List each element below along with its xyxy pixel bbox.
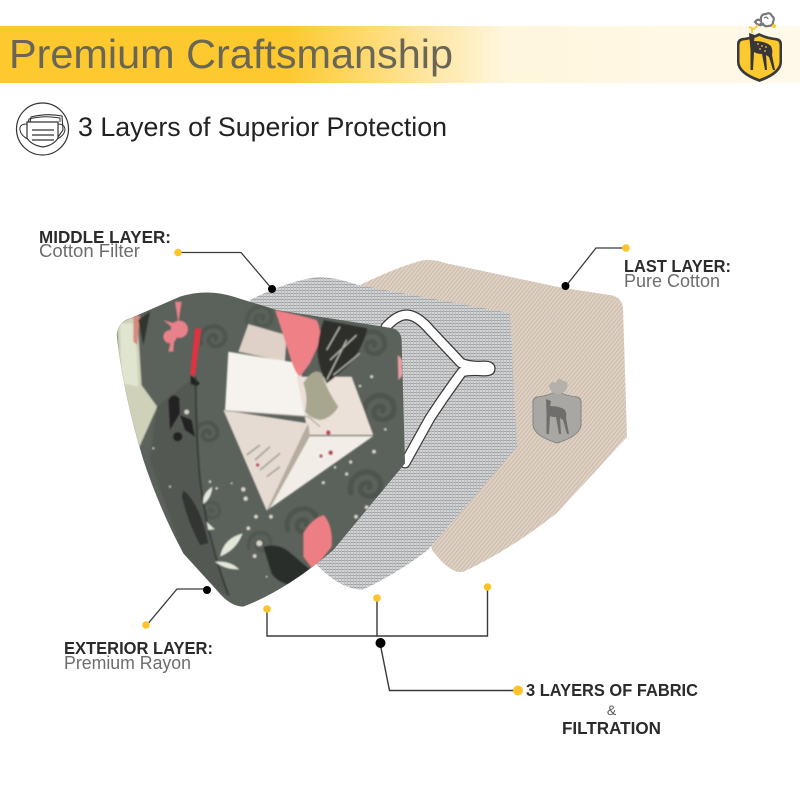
- panel: last layer, pure cotton: [360, 260, 627, 572]
- subtitle: 3 Layers of Superior Protection: [78, 112, 447, 142]
- bottom pink feather: [303, 515, 332, 570]
- white leaves: [203, 487, 243, 569]
- icon: brand logo shield with deer: [737, 13, 782, 82]
- arrow: middle layer leader: [174, 249, 276, 293]
- label: middle layer: [39, 227, 171, 261]
- panel: exterior layer, floral print mask: [116, 292, 405, 607]
- header band: [0, 26, 800, 83]
- bracket: three layers connector: [263, 583, 523, 696]
- label: exterior layer: [64, 638, 213, 673]
- pale feather: [303, 371, 338, 420]
- handwriting marks: [247, 445, 280, 477]
- icon: face mask in circle: [16, 103, 68, 155]
- red strip: [190, 328, 201, 376]
- arrow: exterior layer leader: [142, 586, 211, 629]
- label: exterior layer: Premium Rayon: [64, 653, 191, 673]
- pink flower: [163, 302, 188, 352]
- left pale panel: [117, 315, 157, 452]
- arrow: last layer leader: [562, 244, 630, 290]
- title: Premium Craftsmanship: [9, 31, 453, 77]
- swirls: [357, 332, 385, 354]
- bottom black feather: [263, 546, 311, 585]
- label: last layer: Pure Cotton: [624, 271, 720, 291]
- dark splotches: [168, 375, 200, 441]
- center seam: [196, 377, 228, 595]
- label: last layer: [624, 256, 731, 291]
- label: three layers of fabric and filtration: FILTRATION: [562, 718, 661, 738]
- speckle dots: [152, 375, 387, 578]
- label: exterior layer: EXTERIOR LAYER:: [64, 638, 213, 658]
- right edge pink mark: [398, 355, 403, 380]
- label: last layer: LAST LAYER:: [624, 256, 731, 276]
- label: three layers of fabric and filtration: &: [607, 702, 617, 718]
- label: three layers of fabric and filtration: [526, 680, 698, 738]
- pink feather: [275, 310, 320, 377]
- label: three layers of fabric and filtration: 3 LAYERS OF FABRIC: [526, 680, 698, 700]
- black feather: [318, 320, 367, 383]
- label: middle layer: MIDDLE LAYER:: [39, 227, 171, 247]
- ear strap: [386, 315, 490, 463]
- envelope: [223, 324, 373, 511]
- label: middle layer: Cotton Filter: [39, 241, 140, 261]
- icon: faint deer shield on cotton: [533, 379, 581, 443]
- panel: middle layer, cotton filter: [200, 277, 517, 590]
- dark left shade: [151, 384, 224, 593]
